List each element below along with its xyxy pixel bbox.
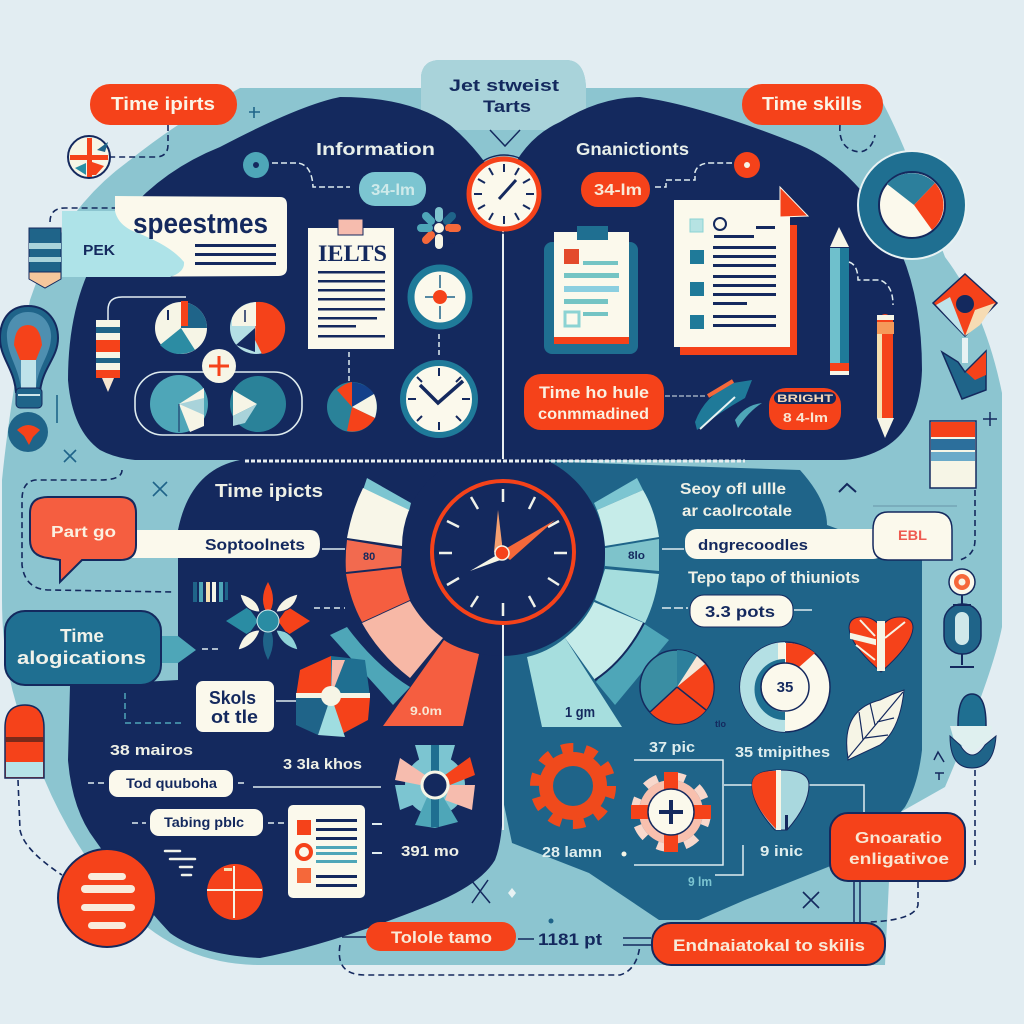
callout: gnoaratio: Gnoaratio xyxy=(855,830,942,847)
node dot and dashes xyxy=(243,152,350,187)
rule xyxy=(253,786,381,788)
connector xyxy=(322,548,345,550)
donut chart: 35 xyxy=(777,679,793,696)
header tab text: Jet stweist xyxy=(449,76,559,95)
pie chart two xyxy=(230,302,285,354)
document xyxy=(674,187,808,355)
top clock xyxy=(465,155,543,233)
small marks xyxy=(934,752,944,780)
icon: small badge xyxy=(8,412,48,452)
bar: soptoolnets: Soptoolnets xyxy=(205,537,305,554)
icon: guitar pick xyxy=(752,770,809,830)
pill: 34-lm red xyxy=(581,172,650,207)
box: time alogications: alogications xyxy=(17,648,146,668)
label: 38 mairos: 38 mairos xyxy=(110,742,193,759)
callout: time ho hule: Time ho hule xyxy=(539,383,649,402)
striped table xyxy=(930,421,976,488)
icon: plus badge xyxy=(202,349,236,383)
box: time alogications: Time xyxy=(60,626,104,646)
callout: gnoaratio xyxy=(830,813,965,881)
pie chart four xyxy=(230,376,286,432)
icon: petal wheel xyxy=(395,745,475,828)
label: 1181 pt: 1181 pt xyxy=(538,930,602,949)
card: speestmes: speestmes xyxy=(133,208,268,240)
pill: time skills: Time skills xyxy=(762,94,862,114)
dot xyxy=(622,852,626,856)
callout: time ho hule: conmmadined xyxy=(538,406,649,423)
connector frame xyxy=(634,760,864,875)
pie chart six xyxy=(640,650,714,724)
panel: top right navy xyxy=(503,97,922,460)
connector dashes xyxy=(18,125,975,975)
dashes xyxy=(88,608,345,823)
pill: bright: 8 4-lm xyxy=(783,410,828,425)
pill: tod quuboha: Tod quuboha xyxy=(126,776,218,791)
dashes beside list xyxy=(372,824,382,853)
panel: bottom right teal xyxy=(503,460,922,920)
callout: gnoaratio: enligativoe xyxy=(849,851,949,868)
label: gnanictionts: Gnanictionts xyxy=(576,139,689,159)
label: 35 tmipithes: 35 tmipithes xyxy=(735,744,830,761)
dashed link between clocks xyxy=(438,334,440,358)
connector: pencils xyxy=(849,262,893,305)
label: 1181 pt xyxy=(538,918,602,949)
icon: striped pencil xyxy=(96,320,120,392)
connector: pencil to pie xyxy=(108,297,186,320)
card: speestmes: PEK xyxy=(83,242,115,259)
icon: wall clock xyxy=(403,363,475,435)
bar: soptoolnets xyxy=(130,530,320,558)
centre divider xyxy=(245,230,745,830)
icon: target clock xyxy=(411,268,469,326)
tab: EBL xyxy=(873,512,952,560)
speech bubble: part go xyxy=(30,497,136,582)
connector xyxy=(662,548,684,550)
icon: microphone one xyxy=(944,569,981,667)
left fan chart: 9.0m xyxy=(410,704,442,718)
right fan chart: 8lo xyxy=(628,550,645,562)
icon: red gear xyxy=(535,748,611,824)
icon: red pencil xyxy=(877,314,894,438)
pie ring badge xyxy=(857,150,967,260)
icon: light bulb xyxy=(0,306,58,408)
box: skols of tle: Skols xyxy=(209,688,256,708)
icon: brush tools xyxy=(695,380,762,430)
icon: microphone two xyxy=(950,694,996,768)
IELTS paper: IELTS xyxy=(318,241,387,266)
pie chart one xyxy=(155,301,207,354)
sparkle xyxy=(983,412,997,426)
box: time alogications xyxy=(5,611,196,685)
dashed link xyxy=(665,395,705,397)
pill: 3.3 pots: 3.3 pots xyxy=(705,604,775,621)
pill: tabing pblc: Tabing pblc xyxy=(164,815,245,830)
box: skols of tle xyxy=(196,681,274,732)
icon: sparkle xyxy=(508,888,516,898)
icon: petal flower small xyxy=(421,211,457,245)
panel: top left navy xyxy=(68,97,503,460)
label: 9 lm: 9 lm xyxy=(688,874,712,889)
label: 391 mo: 391 mo xyxy=(401,843,459,860)
pill: time ipirts xyxy=(90,84,237,125)
icon: diamond xyxy=(933,274,997,336)
label: information: Information xyxy=(316,139,435,159)
pill: tod quuboha xyxy=(109,770,233,797)
label: tepo tapo: Tepo tapo of thiuniots xyxy=(688,568,860,587)
group frame xyxy=(135,372,302,435)
connector: stem xyxy=(342,882,860,945)
pill: endnaiatokal xyxy=(652,923,885,965)
icon: banner pencil xyxy=(29,228,61,288)
icon: arrow shield xyxy=(942,338,986,399)
pill: bright xyxy=(769,388,841,430)
node dot red and dashes xyxy=(655,152,760,187)
icon: pinwheel flower xyxy=(296,656,370,737)
donut chart xyxy=(740,642,830,732)
left fan chart: 80 xyxy=(363,551,375,563)
pill: 3.3 pots xyxy=(690,595,793,627)
pill: 34-lm: 34-lm xyxy=(371,182,415,199)
icon: blue pencil xyxy=(830,227,849,375)
label: seoy of ullle: ar caolrcotale xyxy=(682,503,792,520)
pill: endnaiatokal: Endnaiatokal to skilis xyxy=(673,936,865,955)
paper list xyxy=(288,805,365,898)
rule xyxy=(873,505,957,507)
top tab highlight xyxy=(421,60,586,130)
centre clock xyxy=(432,481,574,623)
IELTS paper xyxy=(308,219,394,349)
right fan chart: 1 gm xyxy=(565,704,595,721)
label: 37 pic: 37 pic xyxy=(649,739,695,756)
icon: flag badge xyxy=(68,136,110,178)
pill: tolole tamo xyxy=(366,922,516,951)
icon: lines xyxy=(165,851,195,875)
label: small value: tlo xyxy=(715,719,726,729)
pie chart three xyxy=(150,375,208,433)
label: seoy of ullle: Seoy ofl ullle xyxy=(680,481,786,498)
label: 28 lamn: 28 lamn xyxy=(542,844,602,861)
pill: time ipirts: Time ipirts xyxy=(111,94,215,114)
speech bubble: part go: Part go xyxy=(51,524,116,541)
icon: small marks xyxy=(57,107,260,496)
dashed link paper to pie xyxy=(348,352,350,385)
pill: tolole tamo: Tolole tamo xyxy=(391,929,492,947)
header tab text xyxy=(449,76,559,116)
pill: 34-lm xyxy=(359,172,426,206)
label: time ipicts: Time ipicts xyxy=(215,481,323,501)
box: skols of tle: ot tle xyxy=(211,707,258,727)
header tab text: Tarts xyxy=(483,97,531,116)
icon: hamburger disc xyxy=(58,849,156,947)
icon: small bars xyxy=(193,582,228,602)
chevron xyxy=(490,130,520,146)
label: 3 3la khos: 3 3la khos xyxy=(283,756,362,773)
pill: tabing pblc xyxy=(150,809,263,836)
icon: heart flag xyxy=(849,617,913,672)
icon: red cross disc xyxy=(207,864,263,920)
connectors xyxy=(662,608,812,610)
tab: EBL: EBL xyxy=(898,527,927,543)
panel: bottom left navy xyxy=(68,460,503,958)
card: speestmes xyxy=(62,196,287,277)
icon: cross mark xyxy=(471,880,490,903)
right fan chart xyxy=(527,478,669,727)
icon: leaf xyxy=(847,690,904,760)
label: 9 inic: 9 inic xyxy=(760,843,803,860)
bar: dngrecoodles xyxy=(685,529,885,559)
pill: 34-lm red: 34-lm xyxy=(594,182,642,199)
clock backing disc xyxy=(399,450,605,656)
left fan chart xyxy=(330,478,479,726)
pie chart five xyxy=(327,382,377,432)
icon: leaf flower xyxy=(226,582,310,660)
bar: dngrecoodles: dngrecoodles xyxy=(698,538,808,554)
callout: time ho hule xyxy=(524,374,664,430)
icon: plus gear xyxy=(631,772,711,852)
pill: time skills xyxy=(742,84,883,125)
connector xyxy=(276,700,296,702)
chevron up xyxy=(839,484,856,492)
clipboard xyxy=(544,226,638,354)
label: seoy of ullle xyxy=(680,481,792,520)
cross mark xyxy=(803,892,819,908)
pill: bright: BRIGHT xyxy=(777,393,833,405)
icon: red capsule xyxy=(5,705,44,778)
